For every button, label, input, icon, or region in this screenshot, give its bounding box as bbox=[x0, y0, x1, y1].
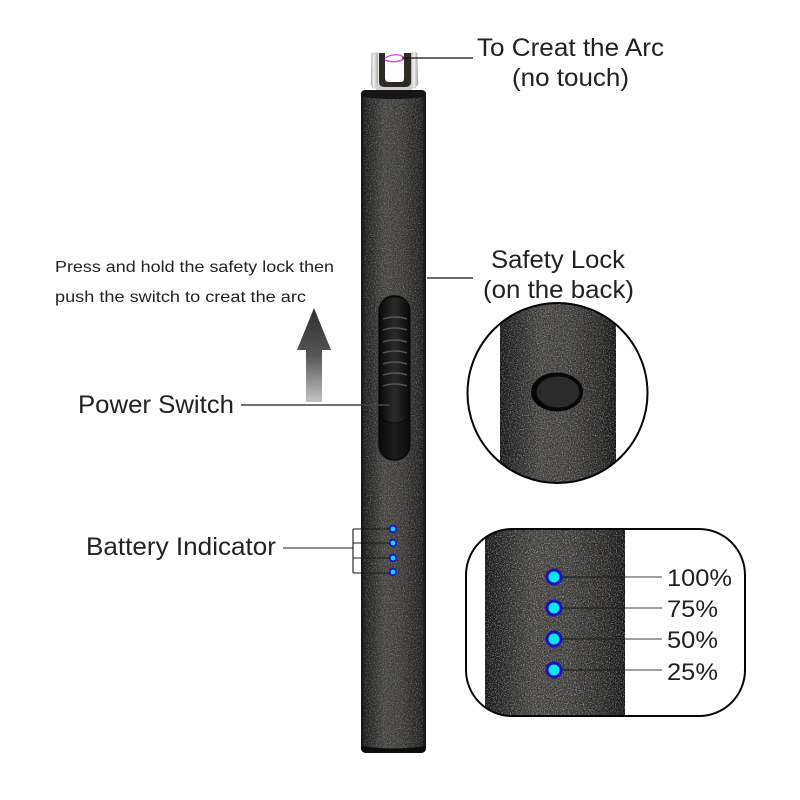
callout: safety lock: Safety Lock bbox=[491, 246, 625, 274]
callout: safety lock bbox=[427, 246, 634, 304]
battery percentages: 100% bbox=[667, 565, 732, 592]
battery percentages: 75% bbox=[667, 596, 718, 623]
battery indicator LEDs on body bbox=[389, 525, 397, 576]
battery level lines bbox=[558, 577, 662, 670]
power switch slider bbox=[378, 295, 411, 461]
callout: battery indicator: Battery Indicator bbox=[86, 533, 276, 561]
battery percentages bbox=[667, 565, 732, 686]
arrow: push up bbox=[297, 308, 331, 402]
callout: to creat the arc bbox=[402, 34, 664, 92]
panel: battery level detail bbox=[466, 525, 745, 720]
panel: safety lock detail circle bbox=[468, 300, 648, 486]
battery percentages: 50% bbox=[667, 627, 718, 654]
instruction text: push the switch to creat the arc bbox=[55, 289, 306, 306]
lighter body bbox=[361, 90, 426, 753]
lighter product: rod with head bbox=[361, 53, 426, 753]
callout: power switch: Power Switch bbox=[78, 391, 234, 419]
icon: safety lock button bbox=[531, 372, 583, 412]
callout: battery indicator bbox=[86, 529, 390, 573]
callout: safety lock: (on the back) bbox=[483, 276, 634, 304]
battery LEDs enlarged bbox=[546, 568, 562, 678]
battery percentages: 25% bbox=[667, 659, 718, 686]
lighter head: silver frame and arc bbox=[371, 53, 418, 90]
callout: to creat the arc: (no touch) bbox=[512, 64, 629, 92]
instruction text bbox=[55, 259, 334, 306]
instruction text: Press and hold the safety lock then bbox=[55, 259, 334, 276]
callout: to creat the arc: To Creat the Arc bbox=[477, 34, 664, 62]
